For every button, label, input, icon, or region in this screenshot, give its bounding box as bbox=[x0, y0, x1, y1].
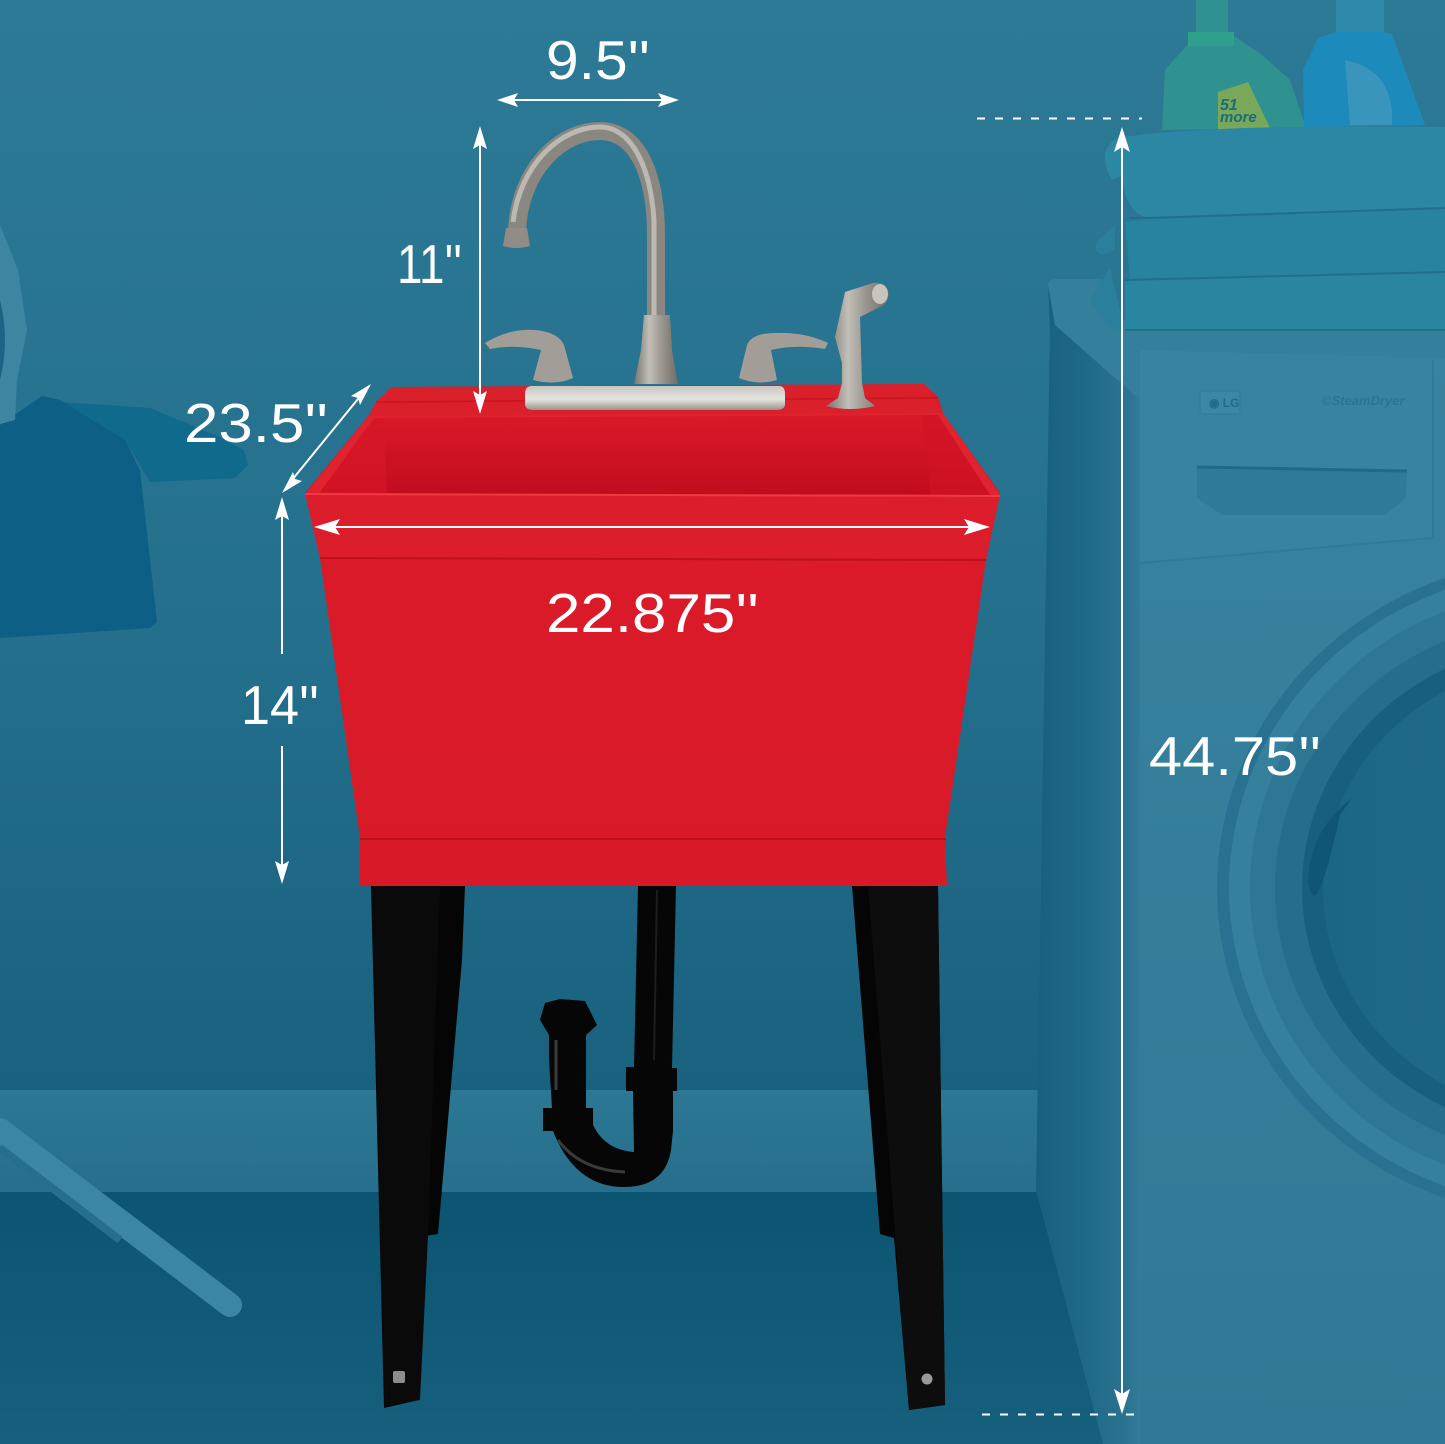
washing machine bbox=[1036, 279, 1445, 1444]
label text on green bottle: 51 bbox=[1220, 97, 1238, 114]
dimension: total height 44.75 inches: 44.75'' bbox=[1149, 725, 1321, 787]
dimension: faucet height 11 inches bbox=[397, 126, 487, 414]
dimension: faucet height 11 inches: 11'' bbox=[397, 233, 462, 295]
stacked towels bbox=[1090, 126, 1445, 330]
ironing board and iron bbox=[0, 225, 248, 1305]
drain pipe bbox=[540, 886, 677, 1187]
dimension: tub height 14 inches bbox=[241, 497, 319, 884]
dimension: tub width 22.875 inches bbox=[314, 519, 990, 644]
detergent bottles bbox=[1162, 0, 1425, 130]
brand text on washer: ◉ LG bbox=[1209, 396, 1239, 410]
faucet with side sprayer bbox=[485, 127, 889, 410]
red utility tub bbox=[305, 384, 1000, 886]
dimension: spout width 9.5 inches bbox=[497, 29, 679, 107]
detergent bottles: more bbox=[1220, 109, 1257, 126]
sink legs bbox=[371, 886, 945, 1410]
dimension: total height 44.75 inches bbox=[977, 118, 1321, 1414]
dimension: depth 23.5 inches bbox=[184, 384, 371, 493]
faucet deck plate bbox=[525, 386, 785, 410]
washing machine: ©SteamDryer bbox=[1322, 393, 1406, 408]
dimension: depth 23.5 inches: 23.5'' bbox=[184, 392, 328, 454]
dimension: spout width 9.5 inches: 9.5'' bbox=[546, 29, 650, 91]
dimension: tub height 14 inches: 14'' bbox=[241, 674, 319, 736]
dimension: tub width 22.875 inches: 22.875'' bbox=[546, 582, 759, 644]
